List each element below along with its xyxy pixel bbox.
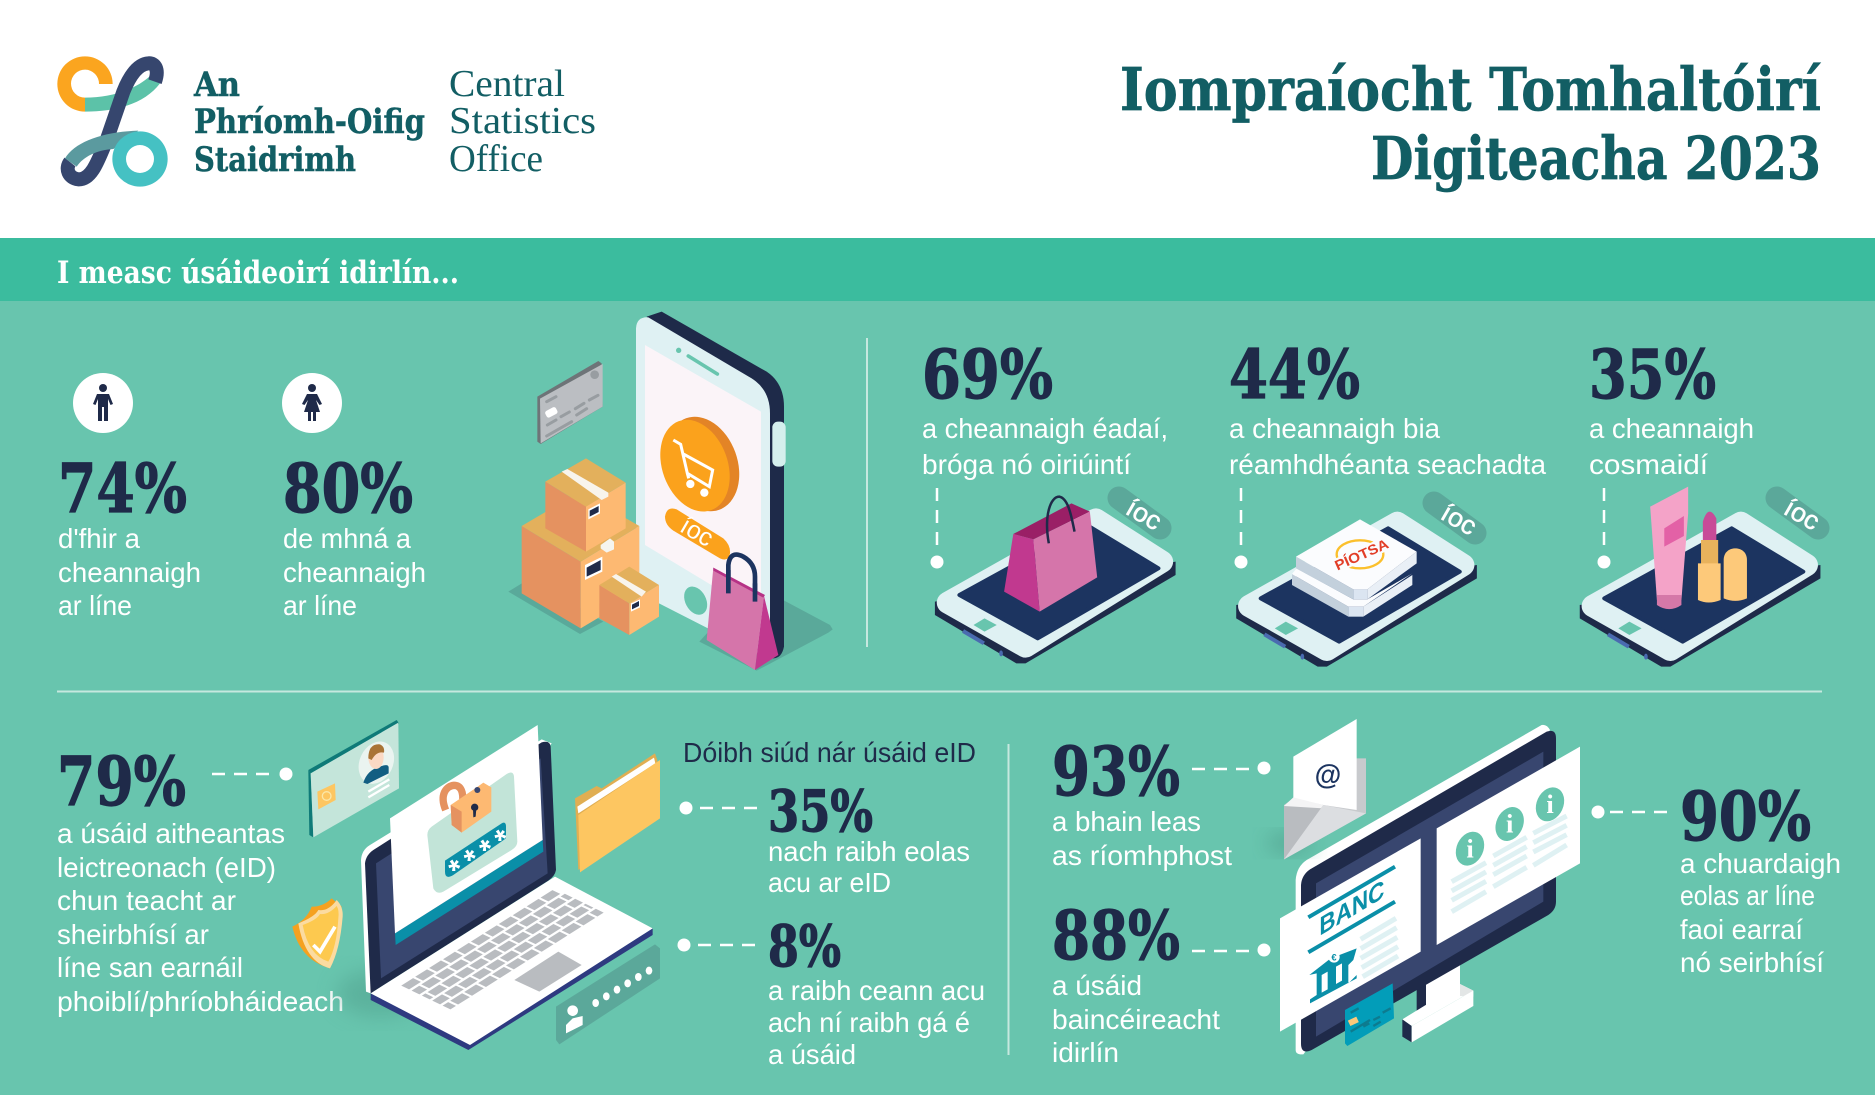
- organisation name Irish: An: [193, 65, 240, 105]
- stat: 8% no need: a úsáid: [768, 1039, 856, 1070]
- pay tag 2: íoc: [1436, 497, 1482, 541]
- stat: cosmetics 35%: cosmaidí: [1589, 449, 1708, 480]
- stat: banking 88%: [1052, 896, 1270, 1068]
- bank card: [1345, 983, 1394, 1046]
- stat: search 90%: eolas ar líne: [1680, 880, 1815, 911]
- stat: food 44%: a cheannaigh bia: [1229, 413, 1440, 444]
- stat: eID 79%: sheirbhísí ar: [57, 919, 209, 950]
- stat: search 90%: [1592, 777, 1841, 978]
- stat: 35% not aware: acu ar eID: [768, 867, 891, 898]
- stat: eID 79%: [57, 742, 344, 1017]
- stat: women 80%: ar líne: [283, 590, 357, 621]
- logo mark: [57, 56, 168, 187]
- stat: search 90%: nó seirbhísí: [1680, 947, 1824, 978]
- stat: women 80%: [282, 373, 426, 621]
- stat: banking 88%: baincéireacht: [1052, 1004, 1220, 1035]
- icon: woman: [302, 384, 322, 421]
- stat: banking 88%: 88%: [1052, 896, 1180, 975]
- stat: email 93%: a bhain leas: [1052, 806, 1201, 837]
- illustration: phone with shopping bag: [935, 497, 1176, 663]
- stat: 8% no need: [678, 913, 985, 1070]
- bank panel: BANC: [1319, 873, 1384, 942]
- stat: cosmetics 35%: a cheannaigh: [1589, 413, 1754, 444]
- stat: women 80%: de mhná a: [283, 523, 411, 554]
- envelope icon: [1267, 719, 1366, 859]
- stat: eID 79%: phoiblí/phríobháideach: [57, 986, 344, 1017]
- shopping bag: [707, 555, 778, 670]
- organisation name English: Office: [449, 138, 543, 180]
- stat: eID 79%: líne san earnáil: [57, 952, 243, 983]
- shield icon: [292, 898, 343, 968]
- stat: 35% not aware: [680, 778, 970, 898]
- title: [1120, 55, 1821, 193]
- info panel: i: [1506, 809, 1514, 839]
- stat: men 74%: 74%: [58, 449, 187, 528]
- stat: 8% no need: 8%: [768, 913, 841, 980]
- stat: search 90%: a chuardaigh: [1680, 848, 1841, 879]
- illustration: laptop with login: [337, 725, 653, 1050]
- stat: eID 79%: chun teacht ar: [57, 885, 236, 916]
- organisation name English: Statistics: [449, 100, 596, 142]
- id card: [308, 720, 401, 837]
- organisation name Irish: Phríomh-Oifig: [194, 102, 425, 142]
- illustration: monitor with bank and info panels: [1280, 725, 1580, 1054]
- section band: [0, 238, 1875, 301]
- stat: food 44%: réamhdhéanta seachadta: [1229, 449, 1546, 480]
- stat: cosmetics 35%: 35%: [1589, 335, 1716, 414]
- stat: banking 88%: idirlín: [1052, 1037, 1119, 1068]
- organisation name English: [449, 63, 596, 180]
- stat: cosmetics 35%: [1589, 335, 1754, 568]
- stat: clothes 69%: [922, 335, 1168, 568]
- pizza boxes: [1292, 519, 1417, 617]
- parcels: [522, 458, 659, 635]
- credit card: [537, 361, 603, 444]
- icon: padlock: [443, 783, 491, 833]
- illustration: phone with pizza boxes: [1236, 523, 1477, 667]
- illustration: smartphone with parcels and bag: [508, 312, 833, 671]
- stat: 35% not aware: nach raibh eolas: [768, 836, 970, 867]
- stat: men 74%: ar líne: [58, 590, 132, 621]
- section band: I measc úsáideoirí idirlín...: [57, 255, 459, 291]
- icon: cart: [673, 440, 713, 495]
- pay button: íoc: [675, 512, 718, 553]
- stat: email 93%: [1052, 732, 1270, 871]
- stat: men 74%: [58, 373, 201, 621]
- stat: food 44%: 44%: [1229, 335, 1360, 414]
- stat: 8% no need: ach ní raibh gá é: [768, 1007, 970, 1038]
- info panel: i: [1466, 833, 1474, 863]
- stat: clothes 69%: bróga nó oiriúintí: [922, 449, 1131, 480]
- stat: 8% no need: a raibh ceann acu: [768, 975, 985, 1006]
- pay tag 1: íoc: [1121, 492, 1167, 536]
- illustration: phone with cosmetics: [1580, 487, 1820, 667]
- bank panel: [1280, 838, 1421, 1032]
- stat: search 90%: faoi earraí: [1680, 914, 1803, 945]
- password field: ****: [443, 823, 517, 887]
- keyboard: [405, 891, 600, 1007]
- stat: search 90%: 90%: [1680, 777, 1811, 856]
- heading: those who did not use eID: Dóibh siúd nár úsáid eID: [683, 737, 976, 768]
- bank panel: €: [1331, 953, 1337, 963]
- icon: man: [93, 384, 113, 421]
- stat: 35% not aware: 35%: [768, 778, 873, 845]
- stat: clothes 69%: a cheannaigh éadaí,: [922, 413, 1168, 444]
- stat: women 80%: cheannaigh: [283, 557, 426, 588]
- pay tag 3: íoc: [1779, 492, 1825, 536]
- stat: eID 79%: a úsáid aitheantas: [57, 818, 285, 849]
- info panel: i: [1546, 789, 1554, 819]
- login field: [556, 944, 660, 1044]
- stat: eID 79%: 79%: [57, 742, 186, 821]
- organisation name Irish: [193, 65, 425, 180]
- organisation name Irish: Staidrimh: [194, 140, 356, 180]
- stat: email 93%: 93%: [1052, 732, 1180, 811]
- stat: food 44%: [1229, 335, 1546, 568]
- folder icon: [575, 753, 660, 872]
- stat: men 74%: cheannaigh: [58, 557, 201, 588]
- info panel: [1437, 747, 1580, 945]
- envelope icon: @: [1315, 759, 1341, 790]
- stat: women 80%: 80%: [283, 449, 413, 528]
- stat: clothes 69%: 69%: [922, 335, 1053, 414]
- pizza boxes: PÍOTSA: [1332, 535, 1391, 573]
- pay button: [665, 509, 730, 560]
- stat: banking 88%: a úsáid: [1052, 970, 1142, 1001]
- stat: men 74%: d'fhir a: [58, 523, 140, 554]
- stat: eID 79%: leictreonach (eID): [57, 852, 276, 883]
- stat: email 93%: as ríomhphost: [1052, 840, 1232, 871]
- organisation name English: Central: [449, 63, 565, 105]
